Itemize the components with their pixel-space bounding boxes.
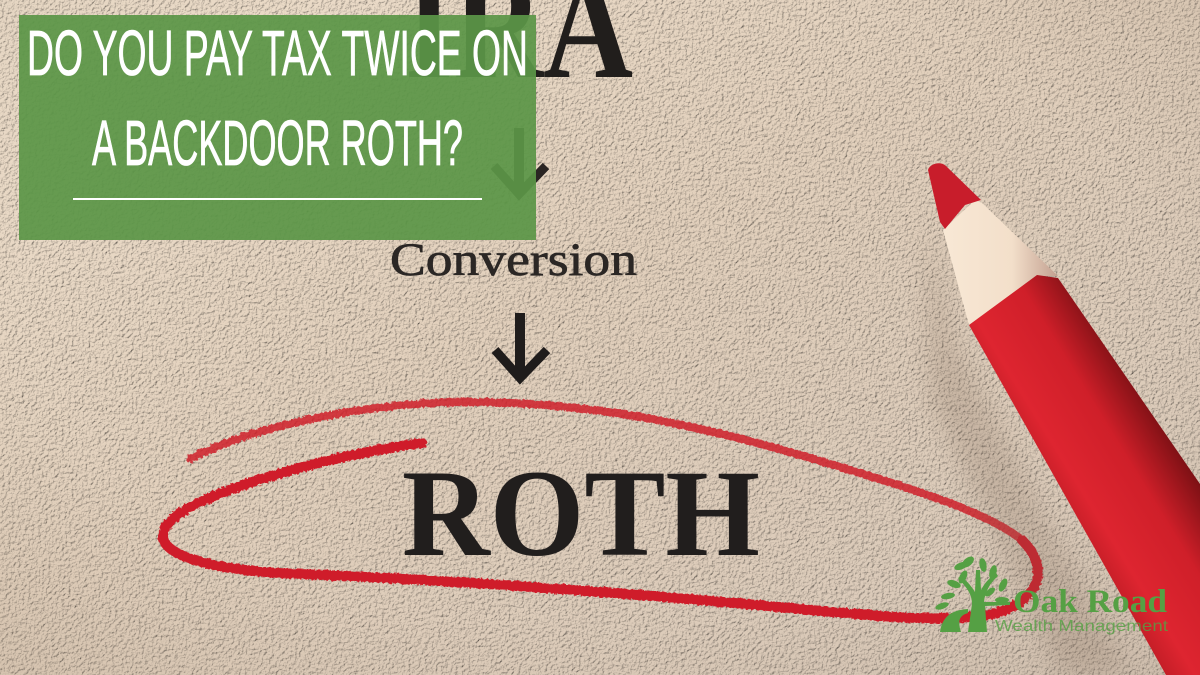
arrow: Conversion to Roth bbox=[495, 313, 547, 378]
title underline bbox=[73, 198, 482, 200]
red pencil circle around Roth bbox=[163, 402, 1038, 618]
logo name: Oak Road bbox=[1013, 584, 1167, 620]
title panel bbox=[19, 15, 536, 240]
title line 1: DO YOU PAY TAX TWICE ON bbox=[27, 17, 528, 89]
pencil wood cone bbox=[943, 200, 1058, 325]
logo tagline: Wealth Management bbox=[995, 618, 1169, 635]
pencil lead tip bbox=[928, 163, 981, 229]
red pencil bbox=[925, 163, 1200, 675]
title line 2: A BACKDOOR ROTH? bbox=[92, 107, 463, 179]
pencil body bbox=[969, 275, 1200, 675]
printed word: Conversion: Conversion bbox=[390, 234, 637, 286]
printed word: ROTH: ROTH bbox=[402, 445, 760, 582]
arrow: IRA to Conversion bbox=[494, 128, 546, 194]
logo: Oak Road Wealth Management bbox=[934, 554, 1169, 635]
icon: oak tree bbox=[934, 554, 1010, 632]
